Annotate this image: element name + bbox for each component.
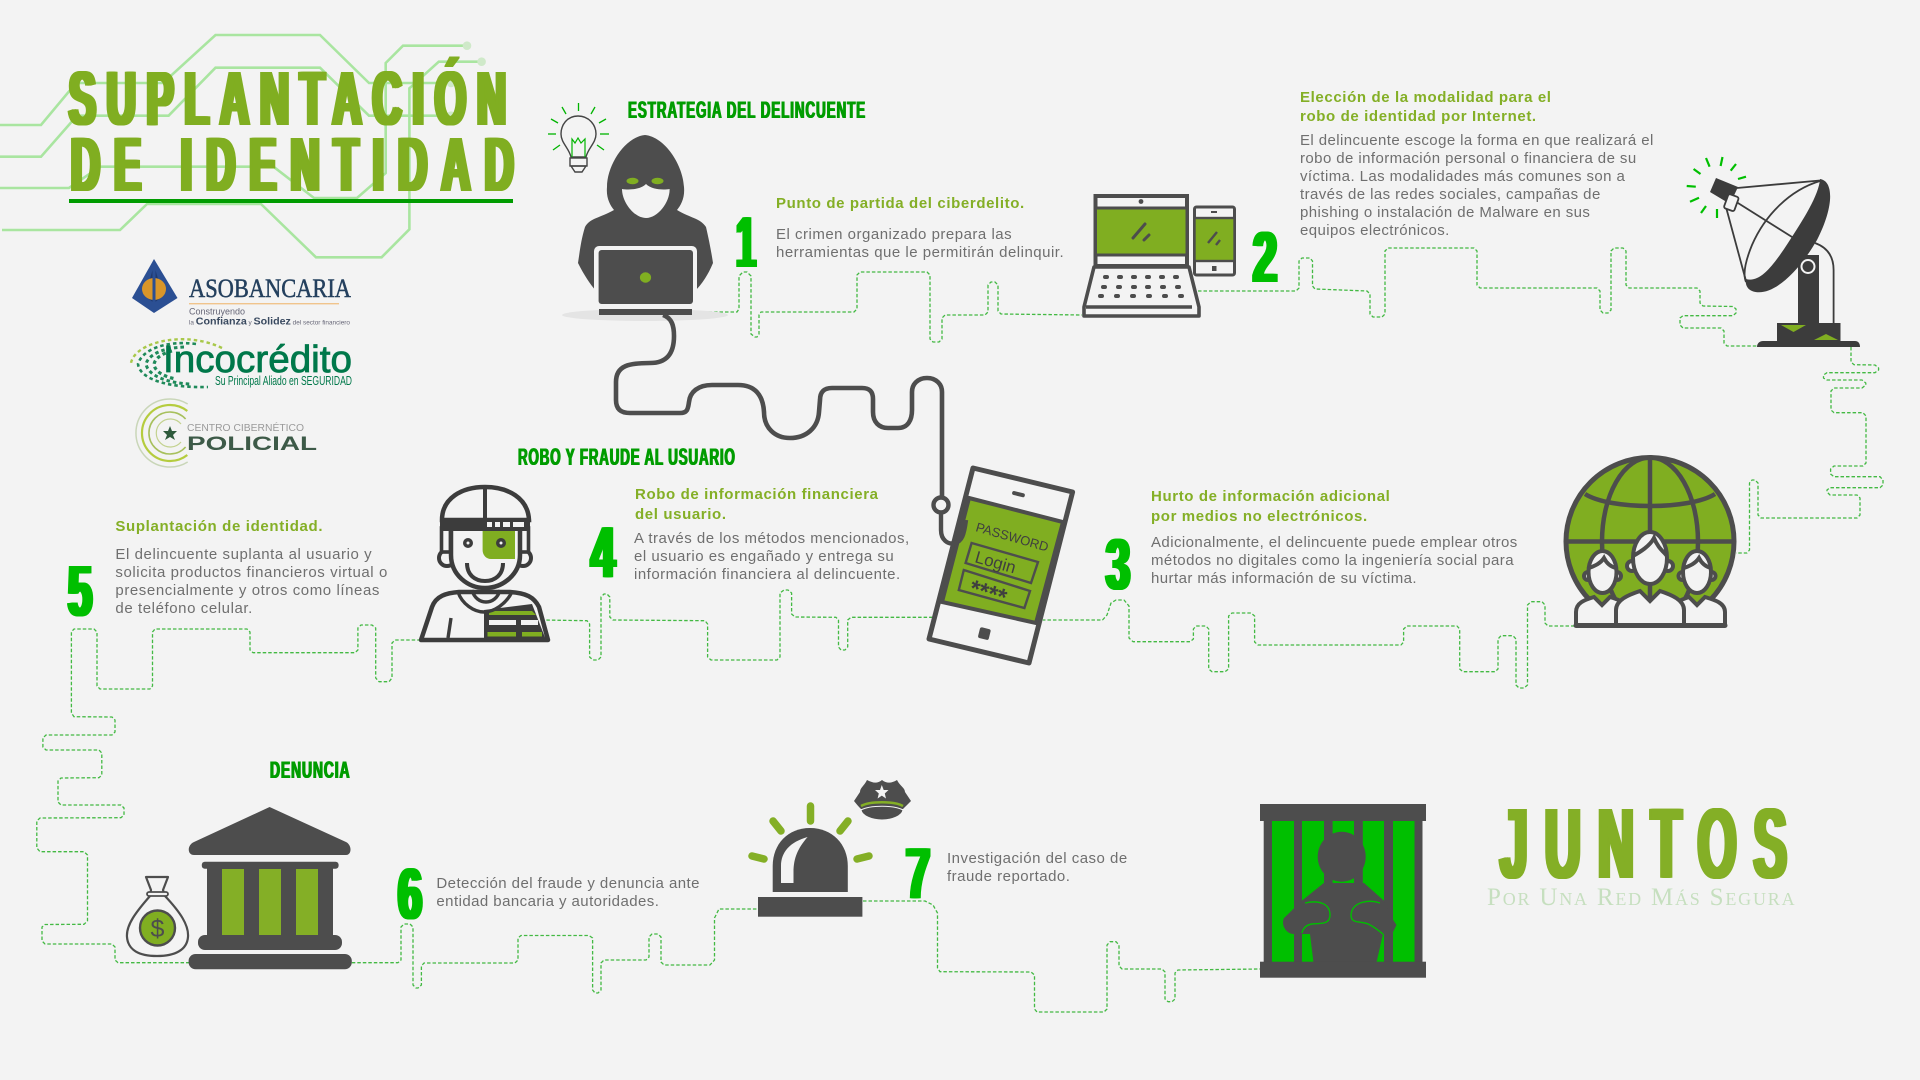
base	[758, 897, 862, 917]
step 3 heading	[1151, 488, 1390, 525]
login box	[966, 543, 1038, 583]
logo: Asobancaria	[132, 259, 351, 328]
icon: prisoner behind bars	[1260, 804, 1426, 978]
laptop	[594, 246, 697, 304]
step 5 text	[115, 546, 388, 617]
password label: PASSWORD	[974, 519, 1050, 555]
smile	[467, 563, 503, 581]
step 1 number: 1	[736, 203, 756, 283]
icon: laptop	[1084, 196, 1199, 316]
hands outline	[1302, 901, 1383, 934]
dark jacket half	[484, 604, 546, 640]
title underline	[69, 199, 513, 203]
slogan subtitle: Por Una Red Más Segura	[1487, 884, 1796, 911]
step 2 heading: robo de identidad por Internet.	[1300, 108, 1537, 125]
wordmark: Incocrédito	[163, 339, 352, 381]
step 4 text: A través de los métodos mencionados,	[634, 530, 910, 546]
face	[451, 528, 520, 588]
wordmark: CENTRO CIBERNÉTICO	[187, 421, 304, 434]
step 4 number: 4	[591, 513, 615, 593]
icon: phone with login screen: Login	[973, 548, 1018, 577]
highlight	[781, 837, 808, 883]
steps	[198, 935, 342, 950]
connector: engineer around left margin to bank	[37, 625, 421, 963]
phone body	[929, 468, 1073, 663]
step 4 heading	[635, 486, 879, 523]
logo: Centro Cibernético Policial: POLICIAL	[187, 434, 318, 455]
connector: devices to satellite dish	[1198, 248, 1758, 346]
step 7 number: 7	[906, 834, 930, 914]
roof	[189, 807, 350, 855]
connector: alarm to jail	[863, 901, 1260, 1012]
password box	[959, 570, 1030, 608]
lintel	[202, 862, 339, 869]
helmet	[442, 487, 529, 520]
icon: globe with three people	[1566, 458, 1734, 626]
star	[163, 426, 177, 440]
step 3 heading: Hurto de información adicional	[1151, 488, 1390, 505]
prisoner	[1283, 832, 1396, 962]
step 2 text: phishing o instalación de Malware en sus	[1300, 204, 1590, 221]
helmet side pieces	[442, 528, 528, 552]
step 3 number: 3	[1106, 525, 1130, 605]
columns block	[207, 868, 333, 936]
step 1 text	[776, 226, 1064, 261]
step 2 text: robo de información personal o financiera de su	[1300, 150, 1637, 167]
title line 2: DE IDENTIDAD	[70, 122, 527, 208]
hood and body	[578, 135, 713, 300]
step 2 heading: Elección de la modalidad para el	[1300, 88, 1552, 106]
tagline: Construyendo	[189, 306, 245, 316]
emblem	[132, 259, 178, 313]
step 6 number: 6	[398, 855, 422, 935]
step 6 text: Detección del fraude y denuncia ante	[436, 875, 700, 892]
face	[622, 184, 670, 218]
step 5 text: de teléfono celular.	[115, 600, 253, 617]
step 7 text: Investigación del caso de	[947, 850, 1128, 867]
cell background	[1264, 815, 1422, 965]
dashed connectors	[37, 248, 1883, 1012]
eyes	[463, 538, 473, 548]
section heading: estrategia: ESTRATEGIA DEL DELINCUENTE	[628, 97, 866, 124]
step 4 heading: del usuario.	[635, 506, 727, 523]
step 2 text: El delincuente escoge la forma en que realizará el	[1300, 132, 1654, 149]
dome	[773, 828, 848, 892]
icon: bank building	[189, 807, 352, 969]
bars top and bottom	[1260, 804, 1426, 821]
person: right	[1672, 551, 1725, 625]
icon: phone with login screen: ****	[966, 575, 1010, 612]
connector: dish to globe down the right margin	[1736, 347, 1883, 553]
dot swirl	[131, 339, 222, 387]
base	[1777, 323, 1840, 342]
step 5 heading: Suplantación de identidad.	[115, 518, 323, 535]
icon: money bag	[127, 877, 188, 956]
tagline: Su Principal Aliado en SEGURIDAD	[215, 373, 352, 388]
connector: bank to alarm	[352, 909, 758, 993]
feed horn	[1710, 178, 1739, 212]
section heading: denuncia: DENUNCIA	[270, 757, 350, 784]
connector: globe to phone	[1043, 600, 1574, 688]
eyes	[626, 178, 638, 184]
rays	[752, 806, 869, 859]
icon: engineer with helmet	[421, 487, 548, 640]
logo: Incocrédito	[131, 339, 352, 388]
signal rays	[1687, 157, 1746, 218]
step 4 text: el usuario es engañado y entrega su	[634, 548, 894, 564]
step 2 text: través de las redes sociales, campañas de	[1300, 186, 1601, 203]
step 3 text: hurtar más información de su víctima.	[1151, 570, 1417, 587]
connector: hacker to laptop	[692, 272, 1082, 342]
step 2 text: equipos electrónicos.	[1300, 222, 1450, 239]
step 4 text: información financiera al delincuente.	[634, 566, 901, 582]
step 6 text: entidad bancaria y autoridades.	[436, 893, 659, 910]
step 5 text: solicita productos financieros virtual o	[115, 564, 388, 581]
step 2 number: 2	[1253, 218, 1277, 298]
ears	[439, 550, 455, 566]
logo: Asobancaria: la Confianza y Solidez del sector financiero	[189, 316, 351, 328]
icon: money bag: $	[151, 915, 165, 943]
slogan: juntos: JUNTOS	[1500, 788, 1804, 900]
step 2 heading	[1300, 88, 1552, 125]
step 5 text: El delincuente suplanta al usuario y	[115, 546, 372, 563]
cable from hacker to phone	[616, 315, 942, 498]
icon: smartphone beside laptop	[1194, 207, 1234, 275]
feed lines	[1726, 180, 1834, 323]
section heading: robo y fraude: ROBO Y FRAUDE AL USUARIO	[518, 444, 736, 471]
step 2 text: víctima. Las modalidades más comunes son a	[1300, 168, 1625, 185]
title line 1: SUPLANTACIÓN	[68, 56, 517, 142]
reflector rim	[1746, 179, 1830, 292]
step 7 text	[947, 850, 1128, 885]
icon: satellite dish	[1687, 157, 1860, 347]
body	[421, 592, 548, 640]
step 1 text: El crimen organizado prepara las	[776, 226, 1012, 243]
icon: phone with login screen	[929, 468, 1073, 663]
connector: phone to engineer	[542, 590, 933, 660]
icon: hooded hacker with laptop	[562, 135, 728, 321]
step 1 heading: Punto de partida del ciberdelito.	[776, 195, 1025, 212]
logo: Centro Cibernético Policial	[136, 399, 318, 467]
step 5 text: presencialmente y otros como líneas	[115, 582, 380, 599]
person: left	[1576, 551, 1628, 625]
step 5 number: 5	[68, 552, 92, 632]
step 3 text: métodos no digitales como la ingeniería social para	[1151, 552, 1514, 569]
step 1 text: herramientas que le permitirán delinquir.	[776, 244, 1064, 261]
circuit decoration behind title	[0, 35, 485, 257]
step 3 text: Adicionalmente, el delincuente puede emplear otros	[1151, 534, 1518, 551]
step 2 text	[1300, 132, 1654, 239]
screen	[942, 498, 1063, 623]
wordmark: ASOBANCARIA	[189, 274, 351, 303]
step 4 text	[634, 530, 910, 582]
step 7 text: fraude reportado.	[947, 868, 1070, 885]
green patch	[483, 529, 515, 559]
step 4 heading: Robo de información financiera	[635, 486, 879, 503]
pedestal	[1798, 255, 1819, 325]
fishing hook on phone	[934, 498, 966, 543]
icon: alarm siren	[752, 806, 869, 917]
rings	[136, 399, 188, 467]
icon: light bulb	[548, 103, 609, 172]
person: centre	[1616, 532, 1684, 625]
jacket stripes	[488, 611, 542, 636]
globe	[1566, 458, 1734, 626]
step 3 heading: por medios no electrónicos.	[1151, 508, 1368, 525]
step 6 text	[436, 875, 700, 910]
step 3 text	[1151, 534, 1518, 587]
icon: police hat	[854, 780, 911, 820]
